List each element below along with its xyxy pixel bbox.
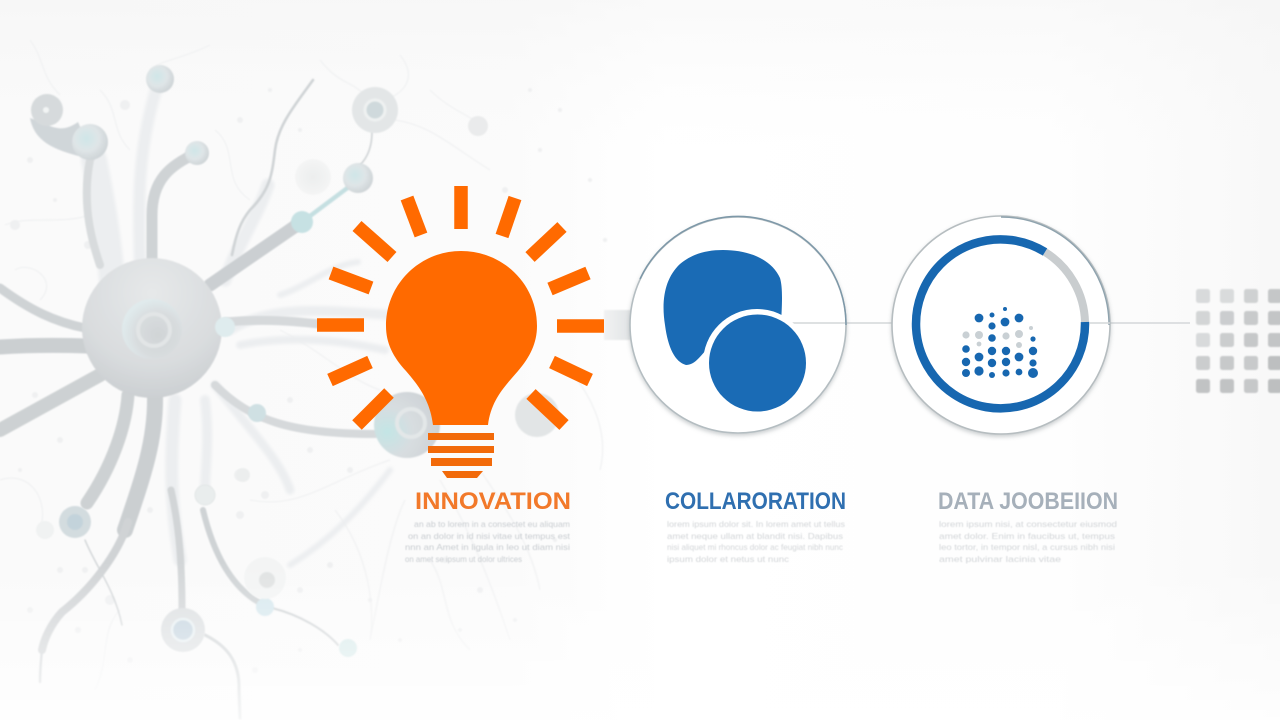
body text: collaboration: nisi aliquet mi rhoncus dolor ac feugiat nibh nunc: [667, 542, 844, 552]
body text: data: leo tortor, in tempor nisl, a cursus nibh nisi: [939, 542, 1115, 552]
dot cluster: [962, 307, 1038, 378]
faint texture of fine branches: [0, 40, 603, 690]
connector tab: [604, 310, 632, 340]
bulb base: [428, 433, 494, 478]
blue circle: [709, 314, 806, 412]
body text: collaboration: ipsum dolor et netus ut nunc: [667, 554, 790, 564]
synapse knobs: [30, 65, 559, 657]
bulb glass: [386, 251, 537, 425]
icon: data circle: [892, 216, 1110, 434]
heading: data: DATA JOOBEIION: [938, 488, 1118, 515]
icon: orange lightbulb: [317, 186, 604, 478]
connector lines: [788, 322, 1190, 324]
white gap ring: [703, 309, 811, 417]
body text: collaboration: amet neque ullam at blandit nisi. Dapibus: [667, 531, 843, 541]
body text: data: lorem ipsum nisi, at consectetur eiusmod: [939, 519, 1117, 529]
heading: innovation: INNOVATION: [415, 488, 571, 515]
column: data: [938, 488, 1118, 564]
body text: innovation: on an dolor in id nisi vitae ut tempus est: [408, 531, 571, 541]
decorative square grid: [1196, 289, 1280, 393]
body text: innovation: nnn an Amet in ligula in leo ut diam nisi: [405, 542, 570, 552]
body text: data: amet dolor. Enim in faucibus ut, tempus: [939, 531, 1115, 541]
cell body: [82, 258, 222, 398]
progress ring value: [916, 239, 1085, 408]
body text: collaboration: [667, 519, 845, 564]
progress ring track: [1045, 252, 1085, 322]
body text: innovation: an ab to lorem in a consectet eu aliquam: [414, 519, 570, 529]
body text: innovation: on amet se ipsum ut dolor ultrices: [405, 554, 522, 564]
column: innovation: [405, 488, 571, 564]
heading: collaboration: COLLARORATION: [665, 488, 846, 515]
faint speckle dots: [10, 88, 607, 673]
body text: innovation: [405, 519, 571, 564]
grey axon limbs: [0, 80, 375, 718]
body text: data: [939, 519, 1117, 564]
pale branches: [94, 90, 390, 565]
body text: collaboration: lorem ipsum dolor sit. In lorem amet ut tellus: [667, 519, 845, 529]
neural network illustration: [0, 40, 607, 718]
light rays: [317, 186, 604, 425]
blue blob shape: [664, 250, 782, 365]
body text: data: amet pulvinar lacinia vitae: [939, 554, 1061, 564]
column: collaboration: [665, 488, 846, 564]
icon: collaboration circle: [630, 216, 846, 433]
